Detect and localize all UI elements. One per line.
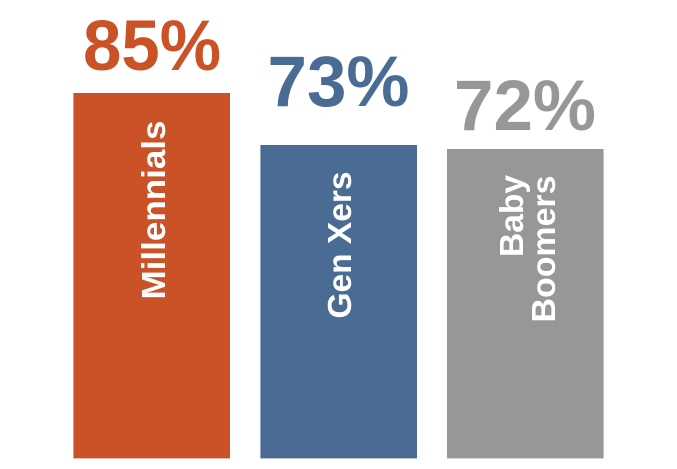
bar group: Baby Boomers — [447, 67, 604, 458]
bar: Gen Xers — [260, 145, 417, 458]
label: Boomers: Boomers — [525, 176, 562, 322]
bar: Millennials — [73, 93, 230, 458]
label: Millennials: Millennials — [135, 120, 172, 300]
value: 85%: 85% — [83, 7, 221, 86]
bar: Baby Boomers — [447, 149, 604, 458]
label: Gen Xers: Gen Xers — [321, 172, 358, 318]
bar group: Gen Xers — [260, 43, 417, 458]
value: 73%: 73% — [268, 43, 410, 122]
bar group: Millennials — [73, 7, 230, 458]
value: 72%: 72% — [454, 67, 596, 146]
label: Baby: Baby — [493, 174, 530, 257]
